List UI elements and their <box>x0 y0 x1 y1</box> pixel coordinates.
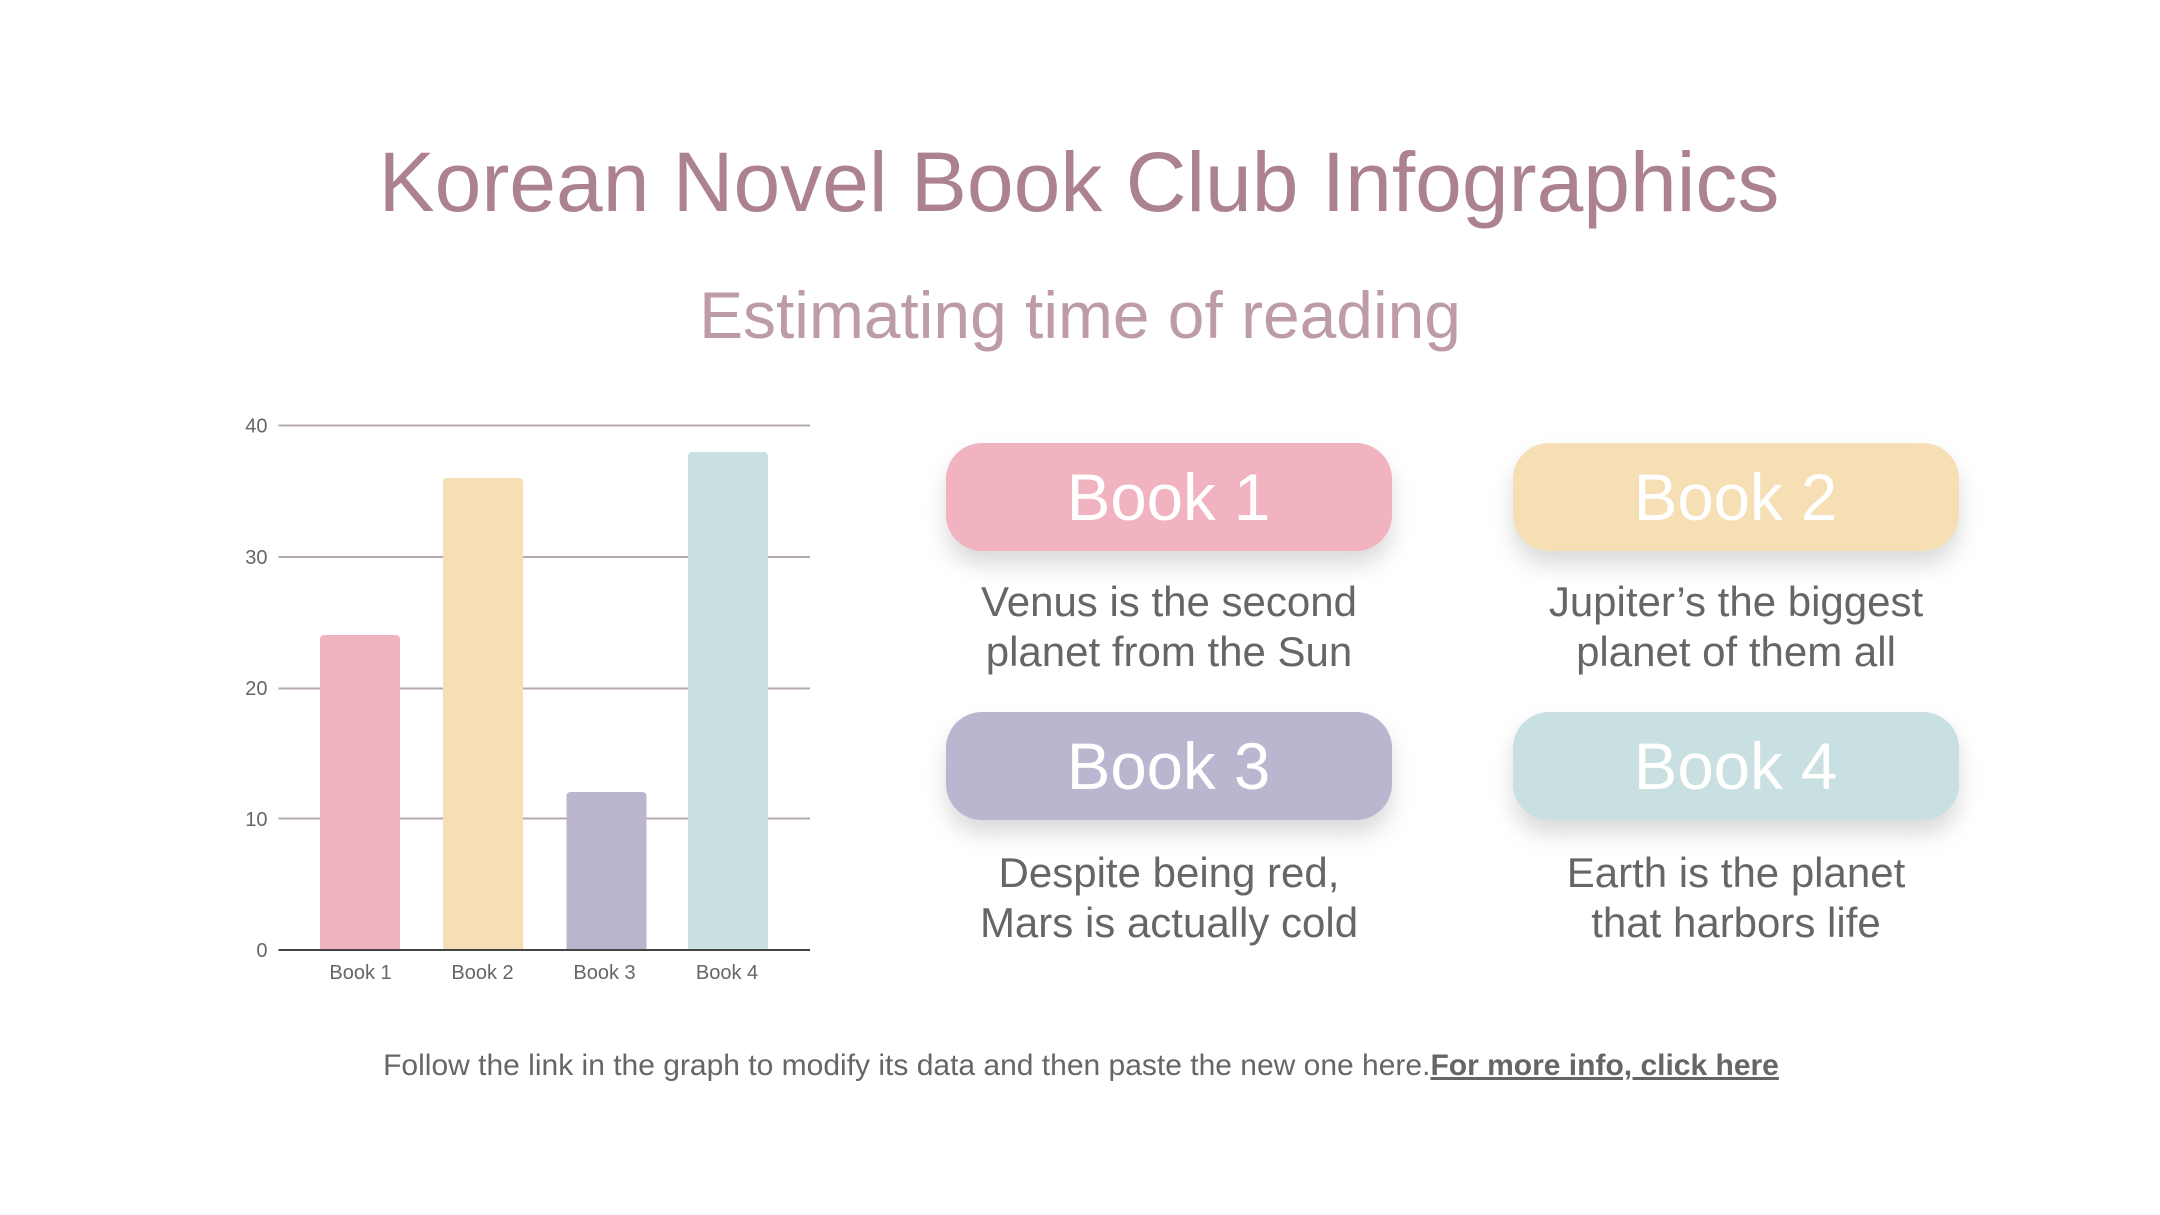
pill: Book 1 <box>946 442 1392 550</box>
x axis labels: Book 3 <box>573 962 636 984</box>
pill: Book 3: Book 3 <box>1067 730 1270 803</box>
y axis labels <box>245 416 268 962</box>
text: Book 4 description <box>1567 848 1905 946</box>
bars <box>320 452 768 950</box>
pill: Book 2: Book 2 <box>1634 460 1837 534</box>
pill: Book 3 <box>946 712 1392 820</box>
text: Book 1 description <box>981 578 1357 675</box>
text: Book 2 description <box>1549 578 1923 675</box>
text: Book 3 description <box>980 848 1358 946</box>
x axis labels: Book 4 <box>696 962 758 984</box>
y axis labels: 0 <box>256 940 268 962</box>
text: Book 4 description: Earth is the planet <box>1567 848 1905 896</box>
title: Korean Novel Book Club Infographics <box>379 135 1779 229</box>
text: Book 3 description: Mars is actually cold <box>980 899 1358 946</box>
pill: Book 4: Book 4 <box>1634 730 1837 803</box>
y axis labels: 10 <box>245 809 268 831</box>
x axis labels: Book 2 <box>451 962 514 984</box>
y axis labels: 40 <box>245 416 268 438</box>
footer note: Follow the link in the graph to modify its data and then paste the new one here.For more info, click here <box>383 1049 1779 1082</box>
pill: Book 2 <box>1512 442 1958 550</box>
x axis labels <box>329 962 758 984</box>
text: Book 2 description: planet of them all <box>1576 628 1896 675</box>
y axis labels: 20 <box>245 678 268 700</box>
subtitle: Estimating time of reading <box>699 278 1461 352</box>
x axis labels: Book 1 <box>329 962 392 984</box>
bar chart <box>245 416 810 984</box>
y axis labels: 30 <box>245 547 268 569</box>
text: Book 2 description: Jupiter’s the biggest <box>1549 578 1923 625</box>
text: Book 3 description: Despite being red, <box>999 848 1339 896</box>
text: Book 1 description: planet from the Sun <box>986 628 1352 675</box>
text: Book 4 description: that harbors life <box>1591 899 1881 946</box>
pill: Book 1: Book 1 <box>1067 460 1270 534</box>
text: Book 1 description: Venus is the second <box>981 578 1357 625</box>
pill: Book 4 <box>1512 712 1958 820</box>
